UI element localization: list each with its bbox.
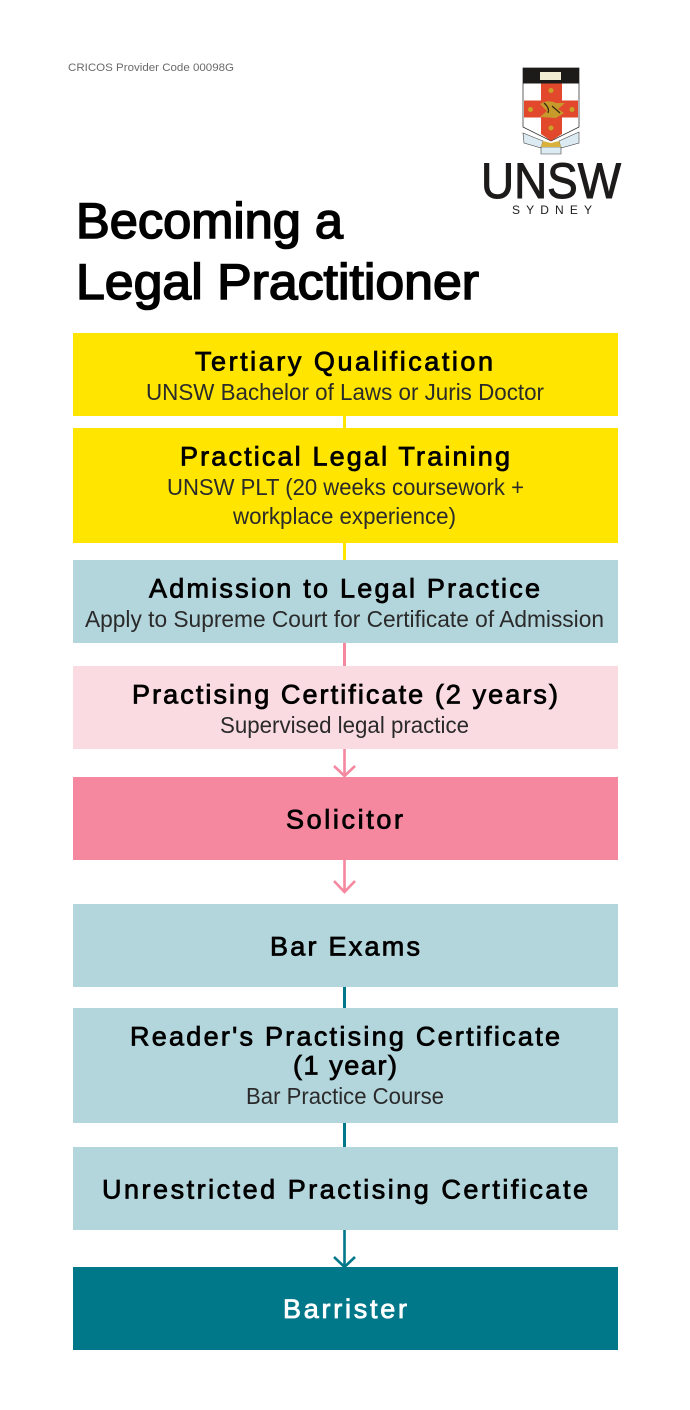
UNSW logo [481,68,622,217]
panel: barrister: Barrister [283,1294,407,1324]
arrow: unrestricted certificate to barrister [334,1230,355,1267]
panel: reader's practising certificate: Reader's Practising Certificate [130,1022,560,1052]
arrow: solicitor to bar exams [334,860,355,892]
panel: bar exams [73,904,618,987]
panel: unrestricted practising certificate [73,1147,618,1230]
panel: admission to legal practice [73,560,618,643]
logo wordmark: UNSW [481,153,622,209]
panel: bar exams: Bar Exams [270,932,420,962]
panel: admission to legal practice: Apply to Supreme Court for Certificate of Admission [85,606,604,632]
panel: practical legal training: workplace experience) [232,503,456,529]
connector: reader's to unrestricted certificate [343,1123,346,1147]
panel: reader's practising certificate: Bar Practice Course [246,1083,444,1109]
arrow: practising certificate to solicitor [334,749,355,776]
connector: admission to practising certificate [343,643,346,666]
panel: unrestricted practising certificate: Unrestricted Practising Certificate [102,1174,588,1204]
panel: solicitor [73,777,618,860]
panel: admission to legal practice: Admission to Legal Practice [149,574,540,604]
title: Becoming a [76,193,343,249]
panel: practical legal training: Practical Legal Training [180,442,510,472]
panel: practical legal training: UNSW PLT (20 weeks coursework + [167,474,524,500]
panel: tertiary qualification: Tertiary Qualification [195,346,493,376]
panel: reader's practising certificate: (1 year) [293,1050,397,1080]
panel: tertiary qualification: UNSW Bachelor of Laws or Juris Doctor [146,379,544,405]
title: Legal Practitioner [76,254,479,310]
panel: practising certificate: Practising Certificate (2 years) [132,680,558,710]
panel: practising certificate: Supervised legal practice [220,712,469,738]
connector: bar exams to reader's certificate [343,987,346,1008]
title [76,193,479,310]
panel: practical legal training [73,428,618,543]
provider code: CRICOS Provider Code 00098G [68,62,234,74]
connector: PLT to admission [343,543,346,560]
panel: solicitor: Solicitor [286,804,403,834]
panel: tertiary qualification [73,333,618,416]
panel: reader's practising certificate [73,1008,618,1123]
connector: tertiary to PLT [343,416,346,428]
icon: shield crest [523,68,579,154]
panel: barrister [73,1267,618,1350]
logo sydney: SYDNEY [512,203,592,217]
panel: practising certificate [73,666,618,749]
